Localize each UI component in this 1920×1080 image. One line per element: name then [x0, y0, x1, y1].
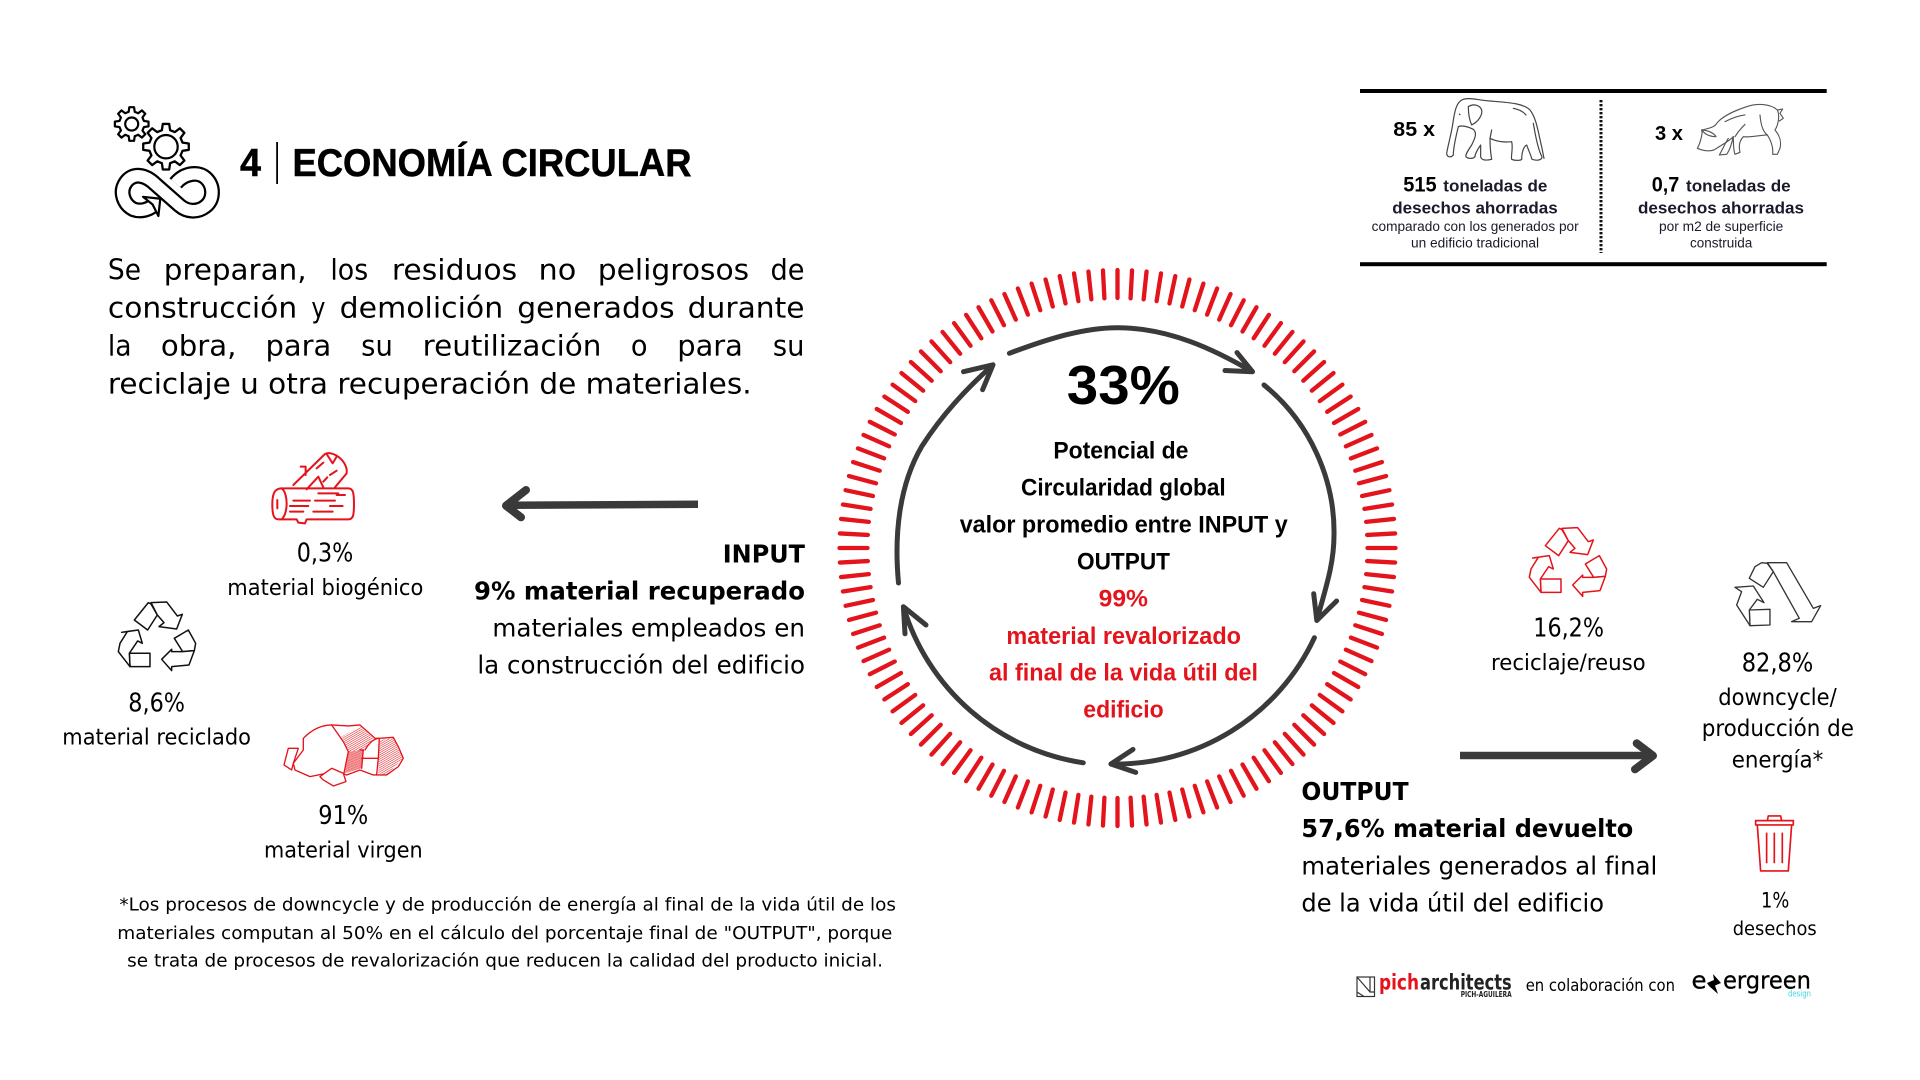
footnote: [117, 895, 896, 972]
title: ECONOMÍA CIRCULAR: [292, 141, 692, 185]
output item: downcycle and energy production: energía*: [1732, 748, 1823, 774]
output item: recycling and reuse: reciclaje/reuso: [1491, 651, 1646, 676]
input item: virgin material: material virgen: [264, 838, 423, 863]
logo: pich architects: pich: [1379, 970, 1419, 994]
icon: gears and infinity loop: [115, 107, 212, 216]
icon: rocks: [284, 725, 403, 786]
central text: global circularity: Potencial de: [1053, 438, 1188, 465]
central text: revalued material: [989, 586, 1258, 724]
input item: recycled material: material reciclado: [62, 725, 251, 750]
input item: virgin material: [264, 725, 423, 863]
output text block: [1301, 777, 1657, 918]
icon: recycling symbol red: [1529, 528, 1607, 596]
intro paragraph: la: [108, 330, 132, 363]
logo: evergreen design: ergreen: [1723, 966, 1811, 994]
output item: recycling and reuse: [1491, 528, 1646, 676]
input text block: [474, 539, 805, 679]
intro paragraph: y: [311, 292, 326, 325]
intro paragraph: reciclaje u otra recuperación de materiales.: [108, 368, 752, 400]
elephant block: toneladas de: [1443, 177, 1547, 196]
logo: evergreen design: [1692, 966, 1811, 1000]
output text block: de la vida útil del edificio: [1301, 889, 1604, 918]
red tick ring: [840, 270, 1396, 826]
circular arrows: [897, 328, 1337, 772]
central text: global circularity: OUTPUT: [1077, 549, 1170, 576]
elephant block: desechos ahorradas: [1392, 198, 1558, 217]
input text block: INPUT: [723, 539, 805, 568]
intro paragraph: [108, 254, 805, 400]
intro paragraph: reutilización: [423, 330, 601, 363]
intro paragraph: su: [361, 330, 393, 363]
logo: evergreen design: design: [1788, 990, 1811, 1000]
central text: revalued material: edificio: [1083, 697, 1164, 724]
elephant block: 85 x: [1393, 119, 1435, 141]
intro paragraph: residuos: [392, 254, 517, 287]
central text: revalued material: 99%: [1099, 586, 1148, 613]
central text: global circularity: [960, 438, 1288, 576]
intro paragraph: construcción: [108, 292, 297, 325]
collaboration text: en colaboración con: [1526, 976, 1675, 995]
intro paragraph: o: [631, 330, 648, 363]
output item: waste: 1%: [1761, 888, 1789, 912]
pig block: por m2 de superficie: [1659, 219, 1783, 234]
input item: virgin material: 91%: [318, 801, 368, 831]
intro paragraph: durante: [688, 292, 805, 325]
elephant block: 515: [1403, 174, 1437, 197]
icon: elephant: [1447, 99, 1544, 160]
elephant block: [1372, 99, 1579, 250]
pig block: toneladas de: [1686, 177, 1791, 196]
input item: biogenic material: material biogénico: [227, 576, 423, 601]
pig block: 3 x: [1655, 123, 1683, 145]
output text block: materiales generados al final: [1301, 852, 1657, 881]
logo: pich architects: PICH-AGUILERA: [1461, 990, 1512, 999]
icon: trash can: [1756, 816, 1793, 871]
intro paragraph: preparan,: [164, 254, 307, 287]
intro paragraph: los: [330, 254, 368, 287]
input item: biogenic material: 0,3%: [297, 538, 353, 568]
arrow: output to the right: [1460, 743, 1653, 769]
icon: logs: [272, 453, 354, 523]
intro paragraph: para: [677, 330, 743, 363]
intro paragraph: su: [773, 330, 805, 363]
input text block: materiales empleados en: [492, 614, 805, 643]
central text: global circularity: valor promedio entre INPUT y: [960, 511, 1288, 538]
intro paragraph: peligrosos: [598, 254, 749, 287]
input item: recycled material: [62, 602, 251, 750]
intro paragraph: para: [265, 330, 331, 363]
pig block: 0,7: [1652, 174, 1679, 197]
arrow: input to the left: [506, 490, 698, 517]
elephant block: comparado con los generados por: [1372, 219, 1579, 234]
elephant block: un edificio tradicional: [1411, 235, 1539, 250]
central text: revalued material: al final de la vida útil del: [989, 660, 1258, 686]
icon: pig: [1697, 104, 1783, 155]
input item: biogenic material: [227, 453, 423, 601]
output item: downcycle and energy production: producción de: [1702, 716, 1854, 742]
intro paragraph: demolición: [340, 292, 503, 325]
intro paragraph: de: [771, 254, 805, 287]
comparison panel: waste saved: [1360, 89, 1827, 266]
output item: waste: desechos: [1733, 919, 1817, 940]
footnote: se trata de procesos de revalorización que reducen la calidad del producto inicial.: [127, 952, 883, 972]
footnote: *Los procesos de downcycle y de producción de energía al final de la vida útil de los: [119, 895, 896, 915]
output item: downcycle and energy production: 82,8%: [1742, 649, 1813, 679]
output item: downcycle and energy production: downcycle/: [1718, 685, 1837, 711]
pig block: construida: [1690, 235, 1753, 250]
central text: global circularity: Circularidad global: [1021, 474, 1226, 502]
pig block: [1638, 104, 1804, 250]
pig block: desechos ahorradas: [1638, 198, 1804, 217]
output item: waste: [1733, 816, 1817, 940]
input text block: la construcción del edificio: [477, 650, 805, 679]
intro paragraph: obra,: [161, 330, 236, 363]
logo: pich architects: architects: [1420, 970, 1512, 994]
intro paragraph: Se: [108, 254, 141, 287]
output item: downcycle and energy production: [1702, 563, 1854, 774]
central text: revalued material: material revalorizado: [1006, 623, 1241, 650]
icon: recycling symbol black: [118, 602, 196, 671]
logo: evergreen design: e: [1692, 966, 1706, 994]
footnote: materiales computan al 50% en el cálculo del porcentaje final de "OUTPUT", porque: [117, 924, 892, 944]
output item: recycling and reuse: 16,2%: [1533, 614, 1604, 644]
icon: downcycle symbol: [1735, 563, 1821, 626]
intro paragraph: generados: [517, 292, 675, 325]
output text block: 57,6% material devuelto: [1301, 814, 1633, 843]
logo: pich architects: [1357, 970, 1512, 999]
central statistic: 33%: 33%: [1067, 354, 1180, 416]
input text block: 9% material recuperado: [474, 576, 805, 605]
title: 4: [240, 142, 261, 185]
output text block: OUTPUT: [1301, 777, 1409, 806]
input item: recycled material: 8,6%: [128, 688, 185, 718]
intro paragraph: no: [539, 254, 576, 287]
